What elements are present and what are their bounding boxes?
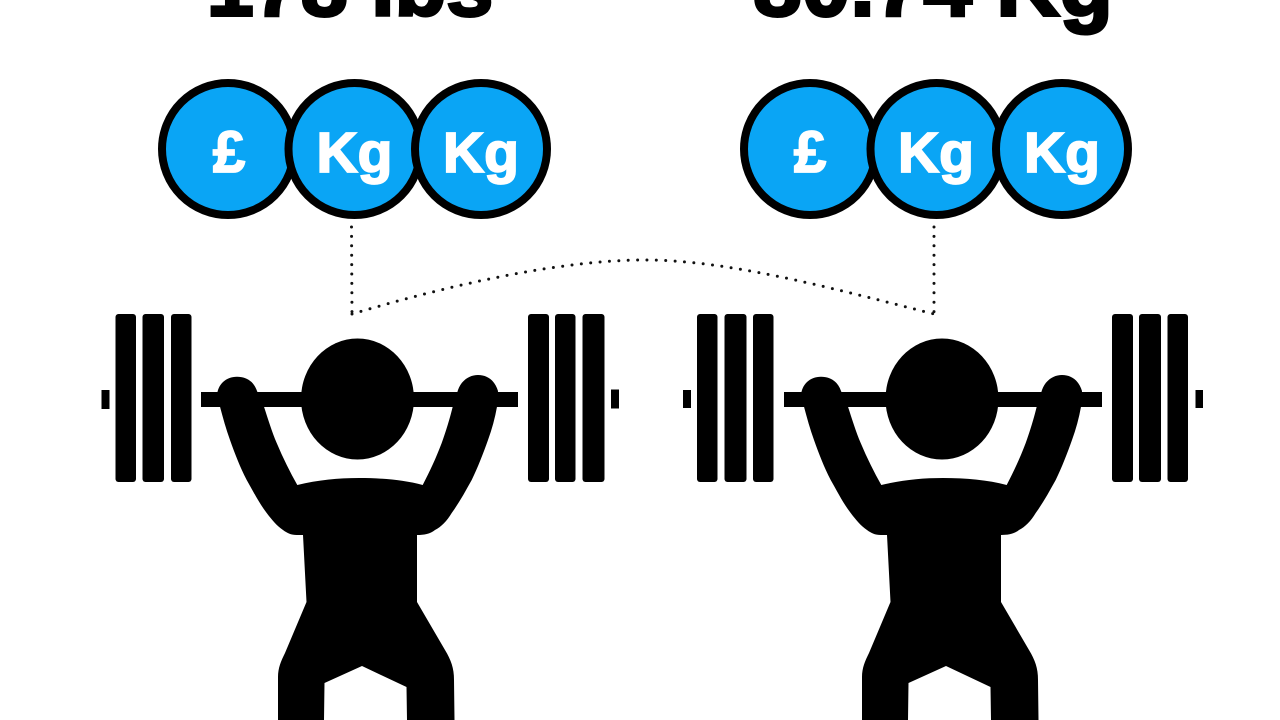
- right circles: pound and kilograms: £: [794, 120, 826, 185]
- dotted connector between the two lifters: [352, 227, 934, 314]
- right weightlifter: [683, 314, 1203, 720]
- left circles: pound and kilograms: [162, 83, 547, 215]
- left circles: pound and kilograms: Kg: [317, 121, 392, 185]
- left circles: pound and kilograms: Kg: [443, 121, 519, 185]
- right circles: pound and kilograms: [744, 83, 1128, 215]
- left weightlifter: [102, 314, 619, 720]
- right circles: pound and kilograms: Kg: [1024, 121, 1100, 185]
- left circles: pound and kilograms: £: [213, 120, 245, 185]
- right circles: pound and kilograms: Kg: [898, 121, 974, 185]
